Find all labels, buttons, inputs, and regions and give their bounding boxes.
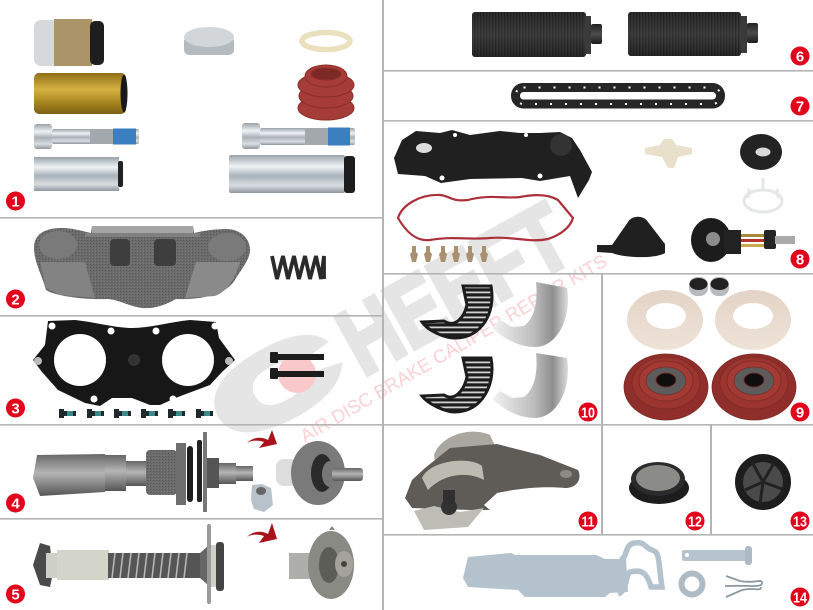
badge 6 xyxy=(790,46,810,66)
sheet plate xyxy=(414,506,484,530)
badge 5: 5 xyxy=(11,586,20,604)
top drum xyxy=(434,432,497,468)
arrow xyxy=(247,430,277,448)
cream ring left xyxy=(627,290,703,350)
shell bottom xyxy=(492,353,568,418)
badge 4: 4 xyxy=(11,496,20,512)
washer xyxy=(682,574,702,594)
cap xyxy=(184,27,234,55)
badge 7 xyxy=(790,96,810,116)
badge 1: 1 xyxy=(11,194,20,210)
short bolt xyxy=(34,124,139,149)
spring xyxy=(272,256,324,279)
plate xyxy=(33,320,235,406)
badge 3: 3 xyxy=(11,400,20,418)
badge 2: 2 xyxy=(11,292,20,308)
bushing xyxy=(34,19,104,66)
panel 9: seals xyxy=(624,277,796,420)
panel 2: bridge and spring xyxy=(34,226,324,308)
red boot xyxy=(298,65,354,120)
panel 8: cover and sensor parts xyxy=(394,130,795,262)
black cone xyxy=(597,217,665,257)
badge 11: 11 xyxy=(582,514,594,530)
black seal ring xyxy=(740,134,782,170)
badge 9 xyxy=(790,402,810,422)
small bushings xyxy=(689,277,729,296)
panel 4: adjuster shaft xyxy=(33,430,363,512)
badge 9: 9 xyxy=(796,404,804,422)
watermark: CHEEFT logo: AIR DISC BRAKE CALIPER REPAIR KITS xyxy=(297,251,611,447)
long bolt xyxy=(242,123,355,149)
nut xyxy=(251,484,273,512)
panel 14: spring plate and pin xyxy=(463,543,762,597)
panel 6: threaded tappets xyxy=(472,12,758,57)
watermark: CHEEFT logo xyxy=(194,184,611,463)
long sleeve xyxy=(229,155,355,193)
badge 5 xyxy=(6,584,25,604)
tappet 1 xyxy=(472,12,602,57)
watermark: CHEEFT logo: C xyxy=(194,309,357,463)
white ring xyxy=(744,178,782,212)
badge 13: 13 xyxy=(793,514,807,530)
end view xyxy=(289,526,354,599)
badge 8 xyxy=(790,250,810,268)
shell top xyxy=(492,282,568,347)
badge 1 xyxy=(6,192,25,210)
badge 8: 8 xyxy=(796,252,804,268)
panel 11: lever xyxy=(405,432,579,530)
plate hook xyxy=(618,543,662,594)
black cover xyxy=(394,130,592,198)
tappet 2 xyxy=(628,12,758,56)
bearing cage bottom xyxy=(422,358,492,412)
badge 12: 12 xyxy=(688,514,702,530)
badge 2 xyxy=(6,290,25,308)
badge 3 xyxy=(6,398,25,418)
ring detail xyxy=(441,490,457,515)
plate xyxy=(463,553,628,597)
cover hole and dome xyxy=(416,133,572,180)
panel 7: chain xyxy=(516,88,720,104)
red boot right xyxy=(712,354,796,420)
shaft assembly xyxy=(33,432,253,512)
panel 12: rubber plug xyxy=(629,462,689,504)
brass sleeve xyxy=(34,73,128,114)
brushed shell xyxy=(422,461,484,490)
panel 3: cover plate xyxy=(33,320,324,418)
gasket xyxy=(398,195,573,240)
arm eye xyxy=(560,470,572,478)
sensor xyxy=(691,218,795,262)
cream ring xyxy=(302,32,350,50)
bridge xyxy=(34,226,250,308)
panel 5: spring shaft xyxy=(33,523,354,604)
small screws xyxy=(59,409,213,418)
panel 10: needle bearings xyxy=(422,282,568,418)
badge 10: 10 xyxy=(581,404,595,422)
cream clip xyxy=(645,139,692,168)
red boot left xyxy=(624,354,708,420)
brass screws xyxy=(410,246,488,262)
arrow xyxy=(247,523,277,543)
bearing cage top xyxy=(422,286,492,338)
shaft with spring xyxy=(33,524,224,604)
panel 1: guide pin kit xyxy=(34,19,355,193)
badge 6: 6 xyxy=(796,48,804,66)
badge 7: 7 xyxy=(796,98,804,116)
badge 14: 14 xyxy=(793,590,808,606)
watermark: CHEEFT logo: HEEFT xyxy=(322,184,587,395)
cream ring right xyxy=(715,290,791,350)
end view xyxy=(276,441,363,505)
cotter clip xyxy=(725,576,762,597)
panel 13: rubber cap xyxy=(735,454,791,510)
short sleeve xyxy=(34,157,123,191)
lever arm xyxy=(405,444,579,510)
badge 4 xyxy=(6,494,25,512)
pin xyxy=(682,546,752,565)
long black bolts xyxy=(270,352,324,379)
